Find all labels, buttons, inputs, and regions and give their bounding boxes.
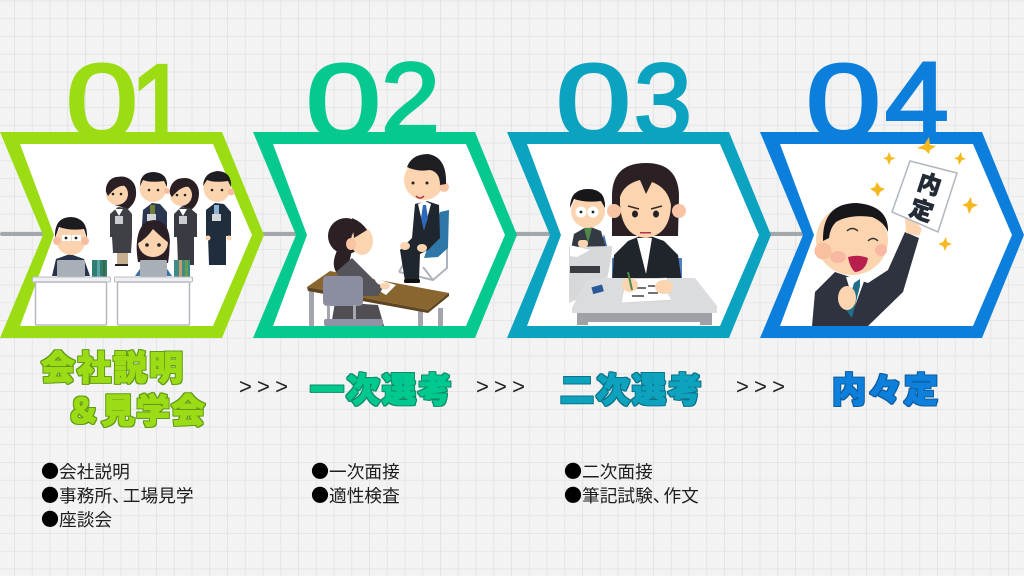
text block: step 1 details: ● [41, 482, 59, 508]
text block: step 2 details: ● [311, 458, 329, 484]
chair [399, 210, 449, 280]
step number 03: 3 [634, 43, 692, 159]
front candidate [572, 163, 717, 326]
text block: step 3 details: 作文 [663, 482, 699, 508]
rear candidate [569, 189, 612, 303]
offer letter [892, 161, 957, 232]
heading: step 4 title: 内々定 [832, 372, 938, 410]
panel: step 1 chevron [0, 132, 264, 338]
head [814, 203, 888, 275]
text block: step 2 details: 適性検査 [329, 482, 400, 508]
text block: step 1 details: 座談会 [59, 506, 112, 532]
step number 02: 2 [381, 43, 440, 157]
panel: step 2 chevron [253, 132, 517, 338]
text block: step 2 details: ● [311, 482, 329, 508]
step number 03: 0 [556, 42, 631, 161]
desks [32, 277, 192, 325]
interviewer and table [307, 218, 449, 326]
seated candidate [400, 154, 449, 283]
shirt and tie [846, 276, 866, 318]
connector line [0, 232, 804, 236]
step number 04: 0 [806, 42, 881, 161]
text block: step 1 details: 事務所、 [59, 482, 130, 508]
books [92, 260, 190, 277]
text block: step 3 details: 筆記試験、 [582, 482, 670, 508]
heading: step 1 title [41, 350, 205, 431]
raised arm and suit [812, 232, 919, 326]
text block: step 2 details: 一次面接 [329, 458, 400, 484]
arrow: step 1 to 2: >>> [239, 374, 293, 399]
text block: step 3 details: 二次面接 [582, 458, 653, 484]
step number 03 [556, 42, 692, 161]
seated man [52, 217, 90, 277]
text block: step 3 details: ● [564, 482, 582, 508]
text block: step 1 details [41, 458, 194, 532]
step number 02: 0 [306, 42, 381, 161]
step number 01: 0 [66, 43, 138, 161]
heading: step 1 title: 会社説明 [41, 350, 183, 388]
heading: step 1 title: ＆見学会 [66, 393, 205, 431]
panel: step 3 chevron [507, 132, 771, 338]
hand [838, 216, 922, 310]
step number 01: 1 [130, 40, 189, 171]
arrow: step 2 to 3: >>> [476, 374, 530, 399]
heading: step 3 title: 二次選考 [560, 372, 702, 410]
illustration: written exam [569, 163, 717, 326]
heading: step 2 title: 一次選考 [310, 372, 452, 410]
standing woman 1 [106, 176, 136, 266]
illustration: job offer [812, 137, 978, 326]
text block: step 1 details: 工場見学 [123, 482, 194, 508]
standing man 2 [140, 172, 170, 240]
step number 04: 4 [885, 41, 949, 159]
text block: step 3 details: ● [564, 458, 582, 484]
arrow: step 3 to 4: >>> [736, 374, 790, 399]
standing woman 3 [170, 178, 199, 265]
text block: step 1 details: 会社説明 [59, 458, 130, 484]
step number 02 [306, 42, 440, 161]
offer letter: 定 [907, 194, 936, 226]
step number 01 [66, 40, 189, 171]
text block: step 2 details [311, 458, 400, 508]
text block: step 1 details: ● [41, 458, 59, 484]
offer letter: 内 [915, 168, 944, 200]
sparkle stars [870, 137, 978, 251]
panel: step 4 chevron [760, 132, 1024, 338]
illustration: company briefing [32, 171, 234, 325]
standing man 4 [203, 171, 234, 265]
illustration: first interview [307, 154, 449, 326]
text block: step 3 details [564, 458, 699, 508]
seated woman [135, 220, 172, 277]
text block: step 1 details: ● [41, 506, 59, 532]
step number 04 [806, 41, 949, 161]
